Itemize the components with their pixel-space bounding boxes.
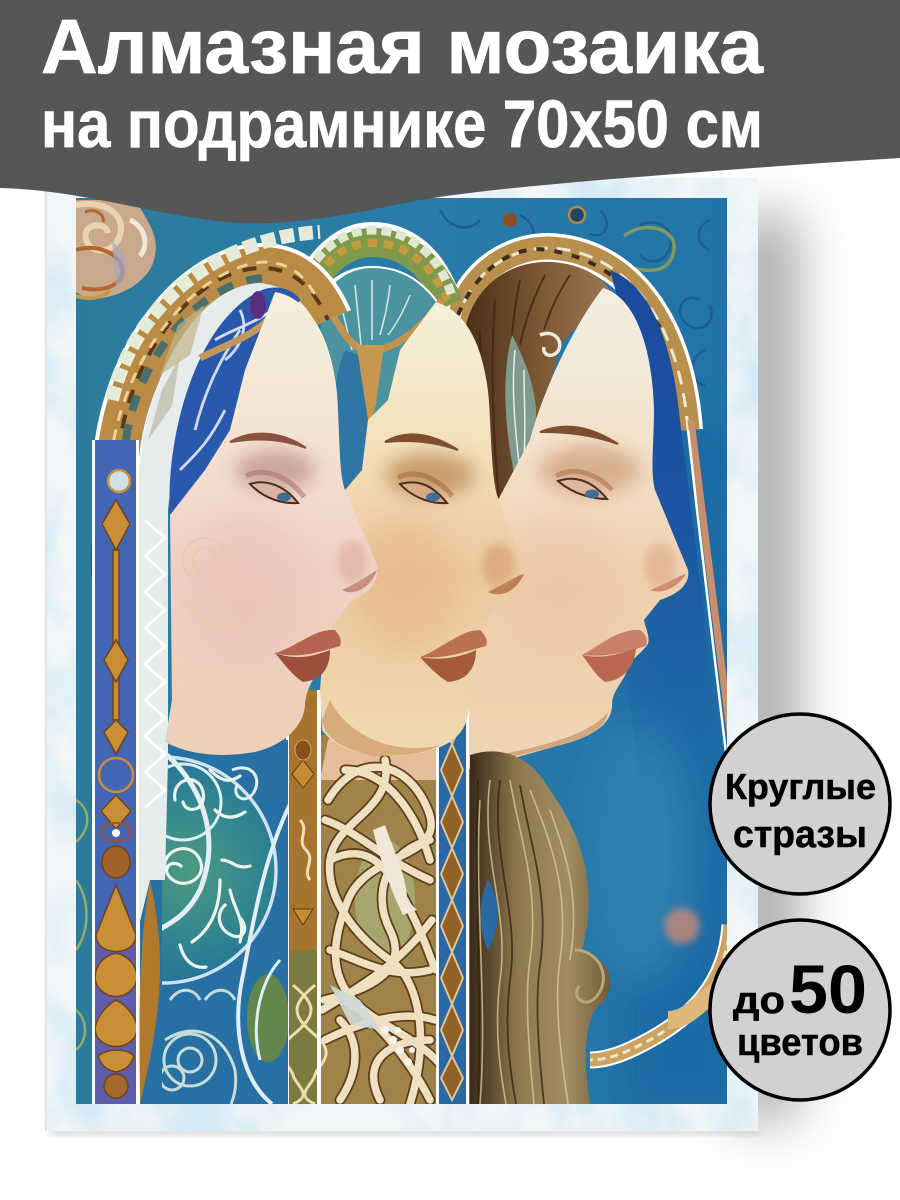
white ribbon band — [138, 283, 314, 1104]
face 3 nose shadow — [650, 574, 686, 591]
face 2 nose shadow — [488, 574, 524, 594]
face 3 lips — [582, 630, 647, 656]
face 1 brow — [230, 434, 306, 448]
face 3 dark blue hood — [610, 270, 706, 638]
far-left dark blue edge decorations — [76, 800, 87, 1050]
gold strip left of knot — [282, 690, 326, 1104]
title — [41, 4, 764, 162]
top centre beads — [503, 213, 517, 227]
top-left swirl ornament — [76, 200, 156, 299]
title: Алмазная мозаика — [41, 4, 764, 90]
badge: up to 50 colours: цветов — [737, 1022, 863, 1064]
face 3 cheek shading — [527, 535, 593, 634]
face 3 arch band — [458, 248, 731, 770]
painting: three profiles — [50, 198, 750, 1120]
badge: up to 50 colours: до — [733, 980, 785, 1022]
badge: up to 50 colours: 50 — [789, 951, 867, 1028]
blue chain strip right of knot — [436, 690, 469, 1104]
face 2 lips — [420, 630, 487, 658]
face 1 eye — [250, 482, 298, 503]
lower hair of face 3 — [470, 751, 610, 1104]
badge: round rhinestones — [710, 714, 890, 894]
rosette — [664, 908, 700, 944]
bottom-left blue panel — [140, 740, 288, 1104]
face 3 brow — [540, 427, 618, 444]
badge: round rhinestones: стразы — [733, 814, 867, 856]
neck centre knot panel — [321, 735, 436, 1104]
face 1 — [165, 292, 378, 755]
face 2 cheek shading — [353, 515, 457, 655]
face 3 — [468, 288, 688, 770]
face 2 hair and hood — [320, 268, 445, 490]
face 2 — [320, 302, 525, 756]
subtitle: на подрамнике 70х50 см — [41, 87, 763, 162]
face 1 cheek shading — [185, 515, 305, 665]
top right swirl ornaments — [92, 210, 712, 830]
right blue field — [602, 434, 726, 1104]
painting background — [76, 198, 727, 1104]
left outer arch band — [110, 232, 328, 1104]
canvas drop shadow — [50, 215, 797, 1135]
face 2 brow — [385, 434, 458, 450]
face 3 eye — [558, 479, 607, 499]
face 2 eye — [400, 482, 447, 503]
face 2 arch band — [310, 222, 463, 306]
header band — [0, 0, 900, 223]
face 1 hood — [169, 287, 300, 515]
face 1 lips — [275, 630, 341, 655]
face 1 nose shadow — [342, 570, 377, 592]
far-left blue strip with gold ornaments — [92, 440, 139, 1104]
badge: up to 50 colours — [710, 920, 890, 1100]
badge: round rhinestones: Круглые — [725, 766, 876, 807]
lower right gold band — [590, 925, 730, 1060]
canvas border with watercolor — [45, 178, 758, 1131]
face 3 upper hair — [466, 262, 610, 499]
